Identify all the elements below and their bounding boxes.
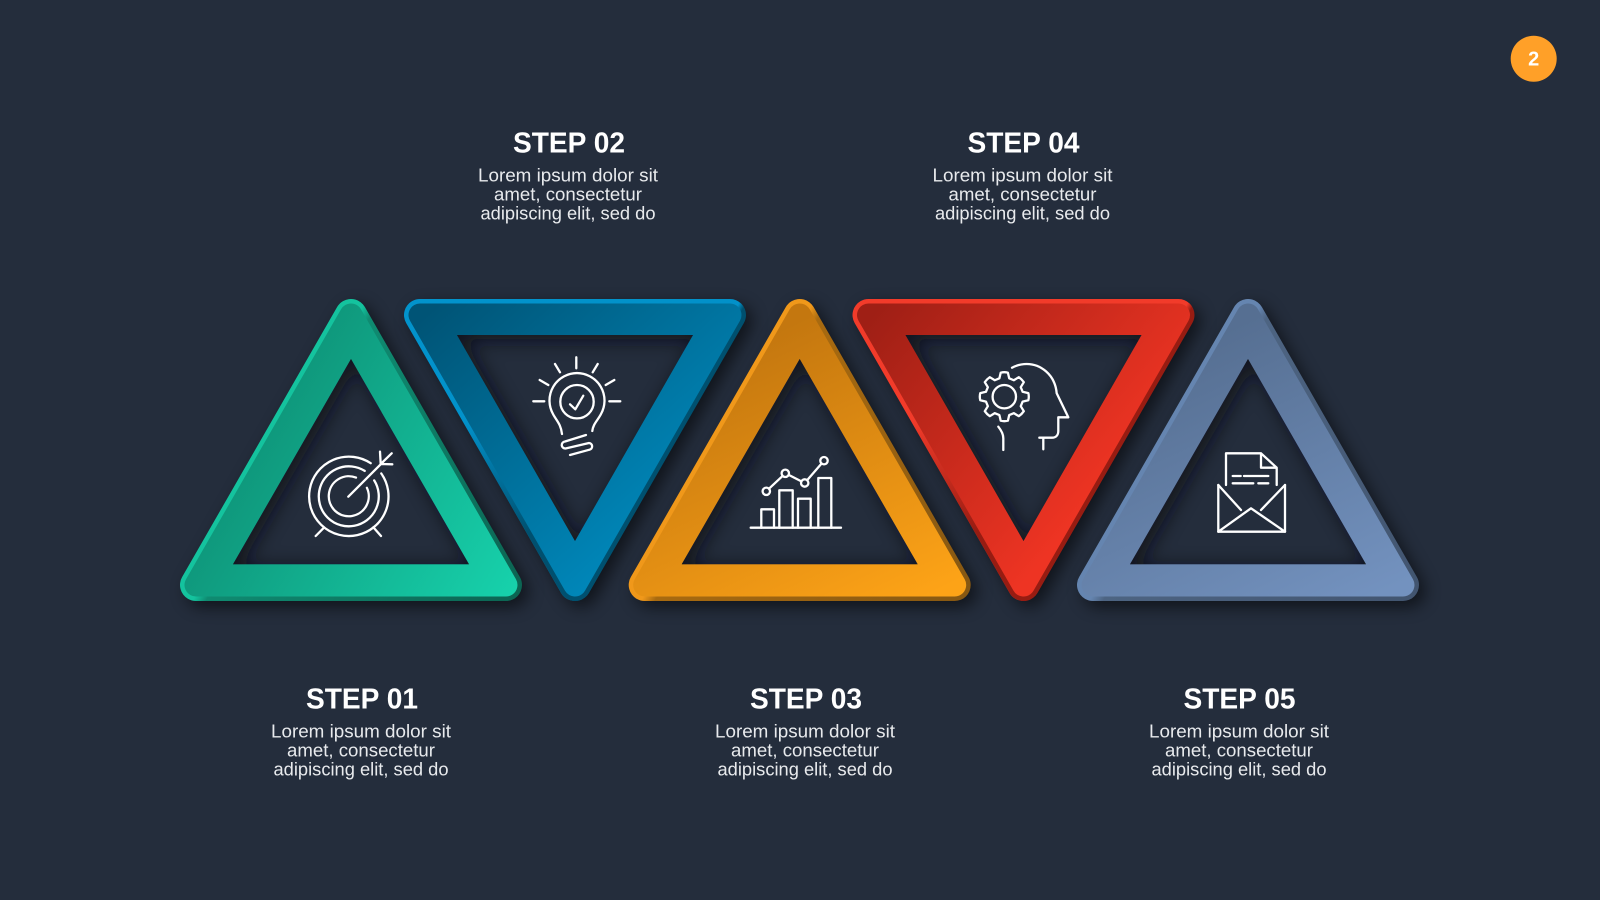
icon: light bulb with check [533,357,620,455]
triangle 4: red [852,299,1204,610]
label: step 03: Lorem ipsum dolor sit [715,722,895,742]
page number badge [1511,36,1557,82]
triangle 3: orange [628,299,980,612]
label: step 05: Lorem ipsum dolor sit [1149,722,1329,742]
page number badge: 2 [1528,49,1539,71]
triangle 2: blue [404,299,756,610]
label: step 04: amet, consectetur [948,185,1096,205]
label: step 04: adipiscing elit, sed do [935,203,1110,223]
icon: envelope with letter [1218,453,1285,532]
icon: bar chart with trend line [751,457,841,528]
label: step 05: adipiscing elit, sed do [1152,759,1326,779]
triangle 1: green [180,299,532,612]
label: step 05 [1149,683,1329,779]
label: step 02: STEP 02 [513,127,625,159]
icon: head with gear [980,364,1068,450]
label: step 02: adipiscing elit, sed do [480,203,656,223]
label: step 02 [478,127,658,223]
label: step 03: STEP 03 [750,683,862,715]
label: step 01: amet, consectetur [287,741,435,761]
icon: target with arrow [309,452,392,536]
label: step 04: STEP 04 [968,127,1080,159]
label: step 01: Lorem ipsum dolor sit [271,722,451,742]
label: step 05: STEP 05 [1184,683,1296,715]
label: step 02: Lorem ipsum dolor sit [478,166,658,186]
label: step 03 [715,683,895,779]
label: step 04: Lorem ipsum dolor sit [932,166,1112,186]
label: step 05: amet, consectetur [1165,741,1313,761]
label: step 03: amet, consectetur [731,741,879,761]
label: step 01 [271,683,451,779]
label: step 02: amet, consectetur [494,185,642,205]
label: step 01: STEP 01 [306,683,418,715]
label: step 04 [932,127,1112,223]
triangle 5: slate [1077,299,1428,612]
label: step 01: adipiscing elit, sed do [274,759,448,779]
label: step 03: adipiscing elit, sed do [718,759,892,779]
